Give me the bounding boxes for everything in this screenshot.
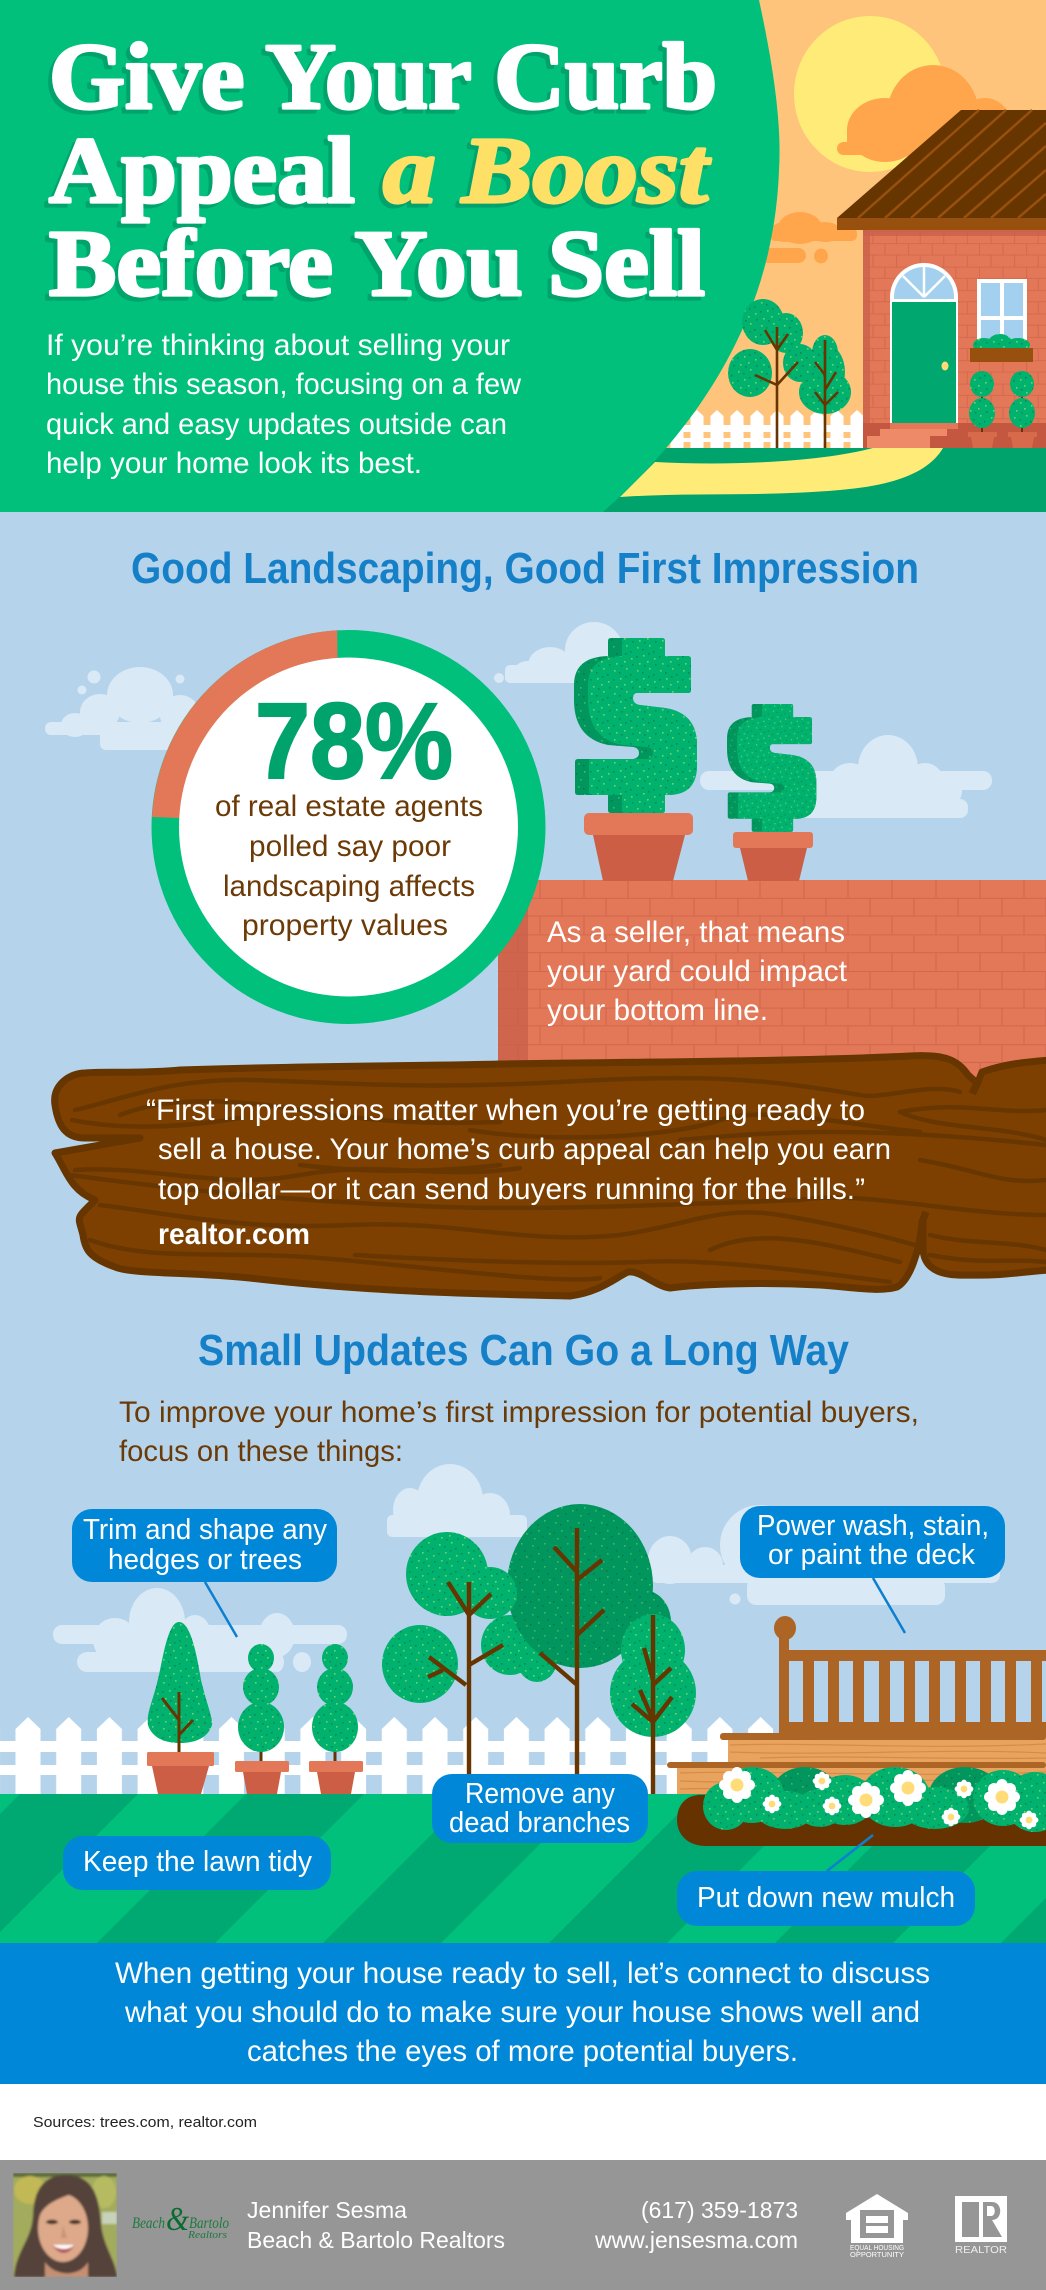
house: [837, 110, 1046, 448]
icon: big dollar sign: [574, 638, 711, 813]
wood plank main: [55, 1056, 977, 1296]
callout: dead branches: Remove any: [465, 1778, 615, 1810]
call to action band: When getting your house ready to sell, let’s connect to discuss: [115, 1957, 930, 1990]
agent contact: Jennifer Sesma: [247, 2197, 408, 2223]
callout: power wash: or paint the deck: [768, 1539, 975, 1571]
intro paragraph: If you’re thinking about selling your: [46, 329, 510, 362]
quote text: sell a house. Your home’s curb appeal can help you earn: [158, 1133, 891, 1166]
callout: power wash: [740, 1506, 1005, 1633]
brokerage logo: Bartolo: [189, 2215, 229, 2232]
seller note: As a seller, that means: [547, 916, 845, 949]
intro paragraph: house this season, focusing on a few: [46, 368, 521, 401]
title: Give Your Curb: [49, 25, 717, 129]
callout: dead branches: [432, 1774, 648, 1843]
stat description: property values: [242, 909, 448, 942]
intro to updates: [119, 1396, 919, 1468]
cloud: garden centre: [387, 1464, 527, 1537]
call to action band: what you should do to make sure your house shows well and: [124, 1996, 920, 2029]
agent photo: [13, 2173, 117, 2277]
seller note: your bottom line.: [547, 994, 768, 1027]
agent contact: Beach & Bartolo Realtors: [247, 2227, 505, 2253]
call to action band: [0, 1943, 1046, 2084]
tree branches: [428, 1528, 672, 1794]
stat description: polled say poor: [249, 830, 451, 863]
icon: realtor: REALTOR: [955, 2245, 1007, 2256]
cloud: garden left: [53, 1588, 347, 1672]
picket fence: [667, 410, 863, 448]
highlighted words: a Boost: [383, 119, 711, 223]
deck: [667, 1616, 1046, 1800]
flower bushes: [703, 1767, 1046, 1832]
potted topiaries: [147, 1622, 363, 1794]
garden trees: [382, 1504, 696, 1794]
roof: [837, 110, 1046, 218]
icon: equal housing: OPPORTUNITY: [850, 2250, 904, 2259]
hero panel: [0, 0, 1046, 512]
intro paragraph: quick and easy updates outside can: [46, 408, 507, 441]
big pot: [584, 813, 693, 881]
quote text: “First impressions matter when you’re getting ready to: [146, 1094, 865, 1127]
donut chart 78 percent: [152, 630, 532, 1010]
hero trees: [728, 299, 851, 448]
icon: realtor: [955, 2196, 1007, 2256]
callout: lawn: Keep the lawn tidy: [83, 1846, 312, 1878]
callout: trim hedges: hedges or trees: [108, 1544, 302, 1576]
cloud right: [700, 735, 992, 818]
brokerage logo: &: [166, 2201, 189, 2238]
title: Appeal: [49, 119, 355, 223]
agent contact: [247, 2197, 798, 2253]
callout: dead branches: dead branches: [449, 1807, 630, 1839]
callout: lawn: [63, 1836, 331, 1890]
garden path: [620, 448, 943, 497]
mulch bed: [677, 1795, 1046, 1846]
icon: small dollar sign: [727, 704, 827, 832]
callout: mulch: Put down new mulch: [697, 1882, 955, 1914]
brick wall: [498, 880, 1046, 1080]
plank seam fill: [926, 1094, 973, 1212]
callout: power wash: Power wash, stain,: [757, 1510, 989, 1542]
ball topiary two: [309, 1644, 363, 1794]
quote text: top dollar—or it can send buyers running for the hills.”: [158, 1173, 865, 1206]
white picket fence: [0, 1717, 780, 1794]
small dollar topiary: [727, 704, 816, 881]
cloud left: [45, 667, 215, 750]
stat description: of real estate agents: [215, 790, 483, 823]
quote text: realtor.com: [158, 1218, 310, 1251]
icon: orange cloud small: [760, 212, 857, 264]
flower box: [970, 334, 1033, 362]
heading: small updates: Small Updates Can Go a Long Way: [198, 1326, 849, 1375]
brokerage logo: [132, 2201, 229, 2241]
icon: equal housing: [846, 2194, 908, 2259]
ball topiary one: [235, 1644, 289, 1794]
ground: [600, 448, 1046, 512]
wood plank right: [923, 1060, 1046, 1275]
footer bar: [0, 2160, 1046, 2290]
statistic: 78%: [255, 680, 453, 801]
call to action band: catches the eyes of more potential buyers.: [247, 2035, 798, 2068]
lawn: [0, 1794, 1046, 1943]
cloud behind dollars: [494, 622, 635, 683]
daisies: [719, 1767, 1038, 1829]
intro paragraph: help your home look its best.: [46, 447, 422, 480]
hero green curve: [0, 0, 780, 512]
heading: good landscaping: Good Landscaping, Good First Impression: [131, 544, 919, 593]
sources strip: [0, 2084, 1046, 2160]
agent contact: (617) 359-1873: [641, 2197, 798, 2223]
deck steps: [667, 1733, 1046, 1800]
stat description: landscaping affects: [223, 870, 475, 903]
front steps: [863, 423, 1046, 448]
wooden sign quote: [55, 1056, 1046, 1296]
small pot: [733, 832, 813, 881]
quote text: [146, 1094, 891, 1251]
orange segment: [152, 630, 338, 818]
seller note: your yard could impact: [547, 955, 848, 988]
sources strip: Sources: trees.com, realtor.com: [33, 2114, 257, 2131]
callout: trim hedges: Trim and shape any: [83, 1514, 327, 1546]
brokerage logo: Realtors: [187, 2229, 227, 2241]
window: [977, 279, 1027, 345]
brick wall: [863, 230, 1046, 448]
stat description: [215, 790, 483, 942]
brokerage logo: Beach: [132, 2215, 165, 2232]
panel: landscaping sky background: [0, 512, 1046, 1944]
icon: orange cloud large: [837, 65, 1013, 165]
cone topiary: [147, 1622, 214, 1794]
wood grain: [70, 1078, 1046, 1282]
deck railing: [774, 1616, 1046, 1736]
tree crowns: [382, 1504, 696, 1737]
front door: [890, 263, 958, 423]
big dollar topiary: [574, 638, 711, 881]
icon: equal housing: EQUAL HOUSING: [850, 2243, 904, 2252]
intro to updates: focus on these things:: [119, 1435, 403, 1468]
seller note: [547, 916, 848, 1027]
agent contact: www.jensesma.com: [594, 2227, 798, 2253]
cloud: garden right: [648, 1505, 1000, 1605]
intro to updates: To improve your home’s first impression for potential buyers,: [119, 1396, 919, 1429]
title: Before You Sell: [49, 212, 705, 316]
callout: mulch: [677, 1835, 975, 1926]
title: [49, 25, 717, 316]
callout: trim hedges: [72, 1509, 337, 1637]
icon: sun: [794, 16, 946, 172]
roof fascia: [837, 218, 1046, 230]
door topiaries: [968, 371, 1037, 448]
intro paragraph: [46, 329, 521, 480]
